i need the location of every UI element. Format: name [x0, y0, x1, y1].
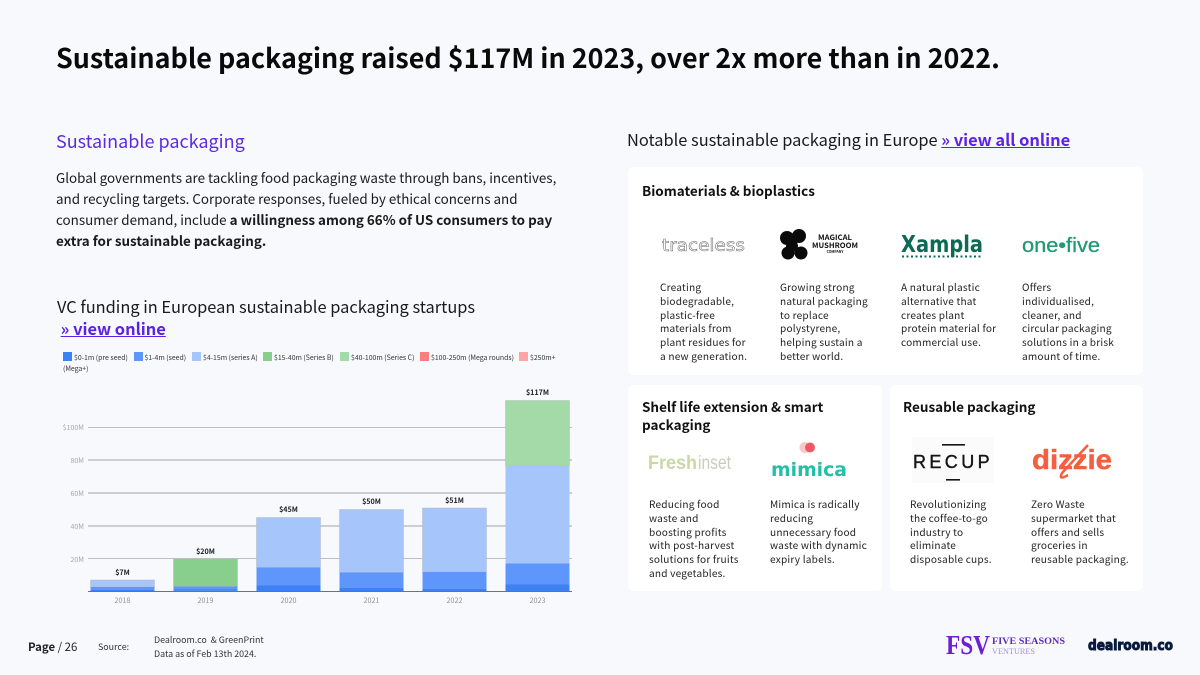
- chart legend: $0-1m (pre seed): [74, 352, 128, 362]
- bar 2021: 2021: [364, 596, 379, 606]
- description: traceless: plant residues for: [660, 334, 746, 349]
- panel heading: Biomaterials & bioplastics: [642, 180, 815, 200]
- panel: biomaterials and bioplastics: [628, 167, 1143, 375]
- logo: one five: one•five: [1022, 235, 1100, 257]
- description: recup: Revolutionizing: [910, 496, 986, 511]
- description: freshinset: and vegetables.: [649, 565, 726, 580]
- description: one five: individualised,: [1022, 293, 1094, 308]
- description: traceless: a new generation.: [660, 348, 747, 363]
- description: magical mushroom: polystyrene,: [780, 320, 840, 335]
- bar 2022: 2022: [447, 596, 462, 606]
- heading: VC funding chart: » view online: [61, 316, 166, 340]
- panel heading: packaging: [642, 414, 710, 434]
- description: mimica: expiry labels.: [770, 551, 835, 566]
- bar 2021: $50M: [362, 497, 381, 507]
- description: xampla: protein material for: [901, 320, 996, 335]
- description: dizzie: offers and sells: [1031, 524, 1104, 539]
- logo: five seasons ventures: VENTURES: [992, 646, 1035, 656]
- y axis labels: 80M: [71, 456, 84, 466]
- bar 2019: [174, 547, 238, 606]
- description: xampla: commercial use.: [901, 334, 981, 349]
- panel: reusable packaging: [890, 385, 1143, 591]
- chart legend: $1-4m (seed): [144, 352, 186, 362]
- heading: notable in Europe: Notable sustainable packaging in Europe » view all online: [627, 127, 1070, 151]
- bar 2022: [422, 496, 486, 606]
- logo: freshinset: Fresh: [648, 453, 697, 474]
- description: one five: solutions in a brisk: [1022, 334, 1114, 349]
- footer: source text: Dealroom.co & GreenPrint: [154, 633, 264, 646]
- logo: dizzie: dizzie: [1032, 444, 1112, 475]
- description: magical mushroom: helping sustain a: [780, 334, 863, 349]
- bar 2023: 2023: [530, 596, 545, 606]
- description: xampla: A natural plastic: [901, 279, 980, 294]
- description: dizzie: Zero Waste: [1031, 496, 1085, 511]
- text block: intro: Global governments are tackling food packaging waste through bans, incentives,: [56, 167, 556, 187]
- description: freshinset: boosting profits: [649, 524, 727, 539]
- logo: mimica: [762, 435, 846, 485]
- text block: intro: and recycling targets. Corporate responses, fueled by ethical concerns and: [56, 188, 518, 208]
- y axis labels: 40M: [71, 522, 84, 532]
- footer: source text: Data as of Feb 13th 2024.: [154, 646, 256, 660]
- bar 2020: [256, 505, 320, 606]
- footer: source label: Source:: [98, 640, 129, 653]
- description: xampla: [901, 279, 996, 349]
- chart legend: $15-40m (Series B): [274, 352, 334, 362]
- description: traceless: plastic-free: [660, 307, 715, 322]
- title: Sustainable packaging raised $117M in 2023, over 2x more than in 2022.: [56, 37, 1000, 76]
- description: dizzie: supermarket that: [1031, 510, 1116, 525]
- bar 2020: $45M: [279, 505, 298, 515]
- description: recup: [910, 496, 992, 566]
- description: xampla: alternative that: [901, 293, 977, 308]
- logo: five seasons ventures: [946, 630, 1065, 658]
- description: magical mushroom: to replace: [780, 307, 829, 322]
- logo: dizzie: [1028, 439, 1118, 485]
- logo: freshinset: inset: [698, 453, 732, 474]
- description: recup: industry to: [910, 524, 963, 539]
- description: dizzie: [1031, 496, 1129, 566]
- chart legend: $250m+: [530, 352, 556, 362]
- footer: page number: Page / 26: [28, 639, 77, 655]
- description: magical mushroom: Growing strong: [780, 279, 855, 294]
- y axis labels: 20M: [71, 555, 84, 565]
- chart legend: $100-250m (Mega rounds): [431, 352, 514, 362]
- heading: VC funding chart: VC funding in European sustainable packaging startups: [57, 294, 475, 318]
- description: traceless: Creating: [660, 279, 701, 294]
- description: traceless: materials from: [660, 320, 732, 335]
- description: traceless: biodegradable,: [660, 293, 734, 308]
- description: recup: disposable cups.: [910, 551, 992, 566]
- chart legend: $4-15m (series A): [203, 352, 258, 362]
- stacked bar chart: [63, 388, 572, 606]
- bar 2018: 2018: [115, 596, 130, 606]
- panel heading: Reusable packaging: [903, 396, 1035, 416]
- description: one five: cleaner, and: [1022, 307, 1082, 322]
- logo: five seasons ventures: FIVE SEASONS: [992, 637, 1065, 647]
- logo: magical mushroom: MUSHROOM: [812, 240, 858, 251]
- description: mimica: reducing: [770, 510, 813, 525]
- logo: xampla: [898, 227, 988, 263]
- logo: traceless: [658, 227, 748, 263]
- description: recup: eliminate: [910, 537, 956, 552]
- bar 2018: [90, 568, 154, 606]
- bar 2023: [506, 388, 570, 606]
- description: freshinset: waste and: [649, 510, 699, 525]
- bar 2020: 2020: [281, 596, 296, 606]
- description: freshinset: solutions for fruits: [649, 551, 739, 566]
- description: mimica: [770, 496, 867, 566]
- logo: traceless: traceless: [662, 236, 745, 256]
- description: freshinset: Reducing food: [649, 496, 720, 511]
- description: freshinset: with post-harvest: [649, 537, 734, 552]
- bar 2019: $20M: [196, 547, 215, 557]
- logo: mimica: mimica: [771, 459, 846, 481]
- description: mimica: waste with dynamic: [770, 537, 867, 552]
- description: one five: circular packaging: [1022, 320, 1112, 335]
- text block: intro: [56, 167, 556, 250]
- description: mimica: Mimica is radically: [770, 496, 860, 511]
- logo: one five: [1018, 227, 1108, 263]
- description: magical mushroom: better world.: [780, 348, 843, 363]
- text block: intro: consumer demand, include a willingness among 66% of US consumers to pay: [56, 209, 552, 229]
- chart legend: $40-100m (Series C): [351, 352, 414, 362]
- logo: recup: RECUP: [913, 452, 993, 472]
- description: mimica: unnecessary food: [770, 524, 856, 539]
- description: one five: amount of time.: [1022, 348, 1100, 363]
- panel heading: [642, 396, 823, 434]
- logo: freshinset: [642, 439, 738, 485]
- panel heading: Shelf life extension & smart: [642, 396, 823, 416]
- description: traceless: [660, 279, 747, 363]
- footer: source text: [154, 633, 264, 660]
- logo: magical mushroom: MAGICAL: [818, 232, 853, 243]
- y axis labels: 60M: [71, 489, 84, 499]
- chart legend: (Mega+): [63, 363, 88, 373]
- logo: magical mushroom: [778, 225, 860, 263]
- description: freshinset: [649, 496, 739, 580]
- heading: sustainable packaging: Sustainable packaging: [56, 128, 245, 154]
- y axis labels: [63, 423, 84, 565]
- chart legend: [63, 352, 556, 373]
- bar 2023: $117M: [526, 388, 549, 398]
- logo: recup: [912, 437, 994, 483]
- description: one five: [1022, 279, 1114, 363]
- bar 2022: $51M: [445, 496, 464, 506]
- description: dizzie: reusable packaging.: [1031, 551, 1129, 566]
- panel: shelf life extension and smart packaging: [628, 385, 882, 591]
- bar 2018: $7M: [115, 568, 130, 578]
- description: xampla: creates plant: [901, 307, 965, 322]
- text block: intro: extra for sustainable packaging.: [56, 230, 266, 250]
- description: one five: Offers: [1022, 279, 1051, 294]
- description: magical mushroom: [780, 279, 868, 363]
- description: dizzie: groceries in: [1031, 537, 1088, 552]
- bar 2021: [340, 497, 404, 606]
- heading: VC funding chart: [57, 294, 475, 340]
- description: magical mushroom: natural packaging: [780, 293, 868, 308]
- y axis labels: $100M: [63, 423, 84, 433]
- description: recup: the coffee-to-go: [910, 510, 988, 525]
- bar 2019: 2019: [198, 596, 213, 606]
- logo: magical mushroom: COMPANY: [827, 250, 844, 255]
